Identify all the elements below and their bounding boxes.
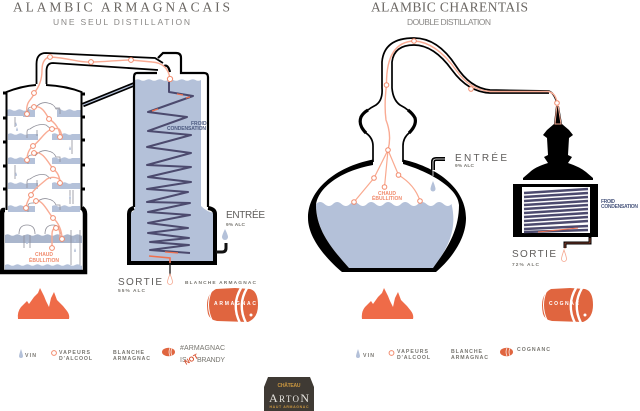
legend: blanche armagnac: BLANCHE — [451, 349, 483, 355]
label: entree left: ENTRÉE — [226, 208, 265, 221]
label: froid condensation: CONDENSATION — [167, 126, 206, 132]
label: froid condensation — [167, 121, 207, 132]
legend: blanche armagnac: BLANCHE — [113, 350, 145, 356]
neck and swan pipe outer — [360, 38, 557, 162]
label: froid right: FROID — [601, 199, 615, 205]
hashtag armagnac is not brandy: BRANDY — [197, 357, 225, 364]
legend: blanche armagnac: ARMAGNAC — [113, 356, 150, 362]
label: entree right — [455, 151, 507, 169]
legend: barrel — [162, 348, 175, 356]
legend: wine: VIN — [363, 353, 374, 359]
label: froid condensation: FROID — [191, 121, 207, 127]
condenser outline lower — [129, 208, 215, 263]
logo: chateau arton: CHÂTEAU — [278, 382, 301, 389]
orange condensation traces — [152, 94, 190, 253]
legend: cognac: COGNANC — [517, 347, 550, 353]
condenser outline upper — [134, 53, 208, 207]
dripping wine drops — [15, 122, 76, 252]
legend: barrel — [500, 348, 513, 356]
label: sortie right: SORTIE — [512, 249, 556, 260]
legend: wine: VIN — [25, 353, 36, 359]
connecting pipe — [83, 84, 135, 105]
hashtag armagnac is not brandy: #ARMAGNAC — [180, 345, 225, 352]
logo: chateau arton: ARTON — [269, 391, 309, 405]
legend: blanche armagnac — [113, 350, 150, 362]
label: chaud ebullition left: CHAUD — [35, 252, 53, 258]
logo: chateau arton: HAUT ARMAGNAC — [270, 405, 309, 409]
icon: barrel armagnac — [207, 288, 258, 323]
label: blanche armagnac: BLANCHE ARMAGNAC — [185, 280, 257, 286]
icon: flame left — [18, 288, 69, 319]
label: chaud ebullition left — [29, 252, 59, 264]
subtitle: une seul distillation: UNE SEUL DISTILLATION — [53, 17, 190, 27]
legend: wine — [19, 349, 36, 359]
logo: chateau arton — [264, 377, 314, 411]
legend: blanche armagnac — [451, 349, 488, 361]
icon: barrel cognac: COGNAC — [549, 301, 579, 307]
pot body outline — [308, 160, 466, 272]
column top pipe — [36, 53, 163, 84]
legend: blanche armagnac: ARMAGNAC — [451, 355, 488, 361]
icon: barrel cognac — [542, 288, 593, 323]
column liquid trays — [5, 109, 82, 271]
bubble caps — [15, 103, 80, 265]
hashtag armagnac is not brandy — [180, 345, 225, 367]
pot liquid — [316, 202, 453, 268]
legend: vapeurs — [389, 349, 431, 361]
label: entree right: ENTRÉE — [455, 151, 507, 164]
condenser cap — [523, 106, 593, 180]
legend: wine — [356, 349, 374, 359]
outlet pipe — [169, 263, 171, 277]
cap vapour line — [555, 105, 561, 124]
label: chaud ebullition right: ÉBULLITION — [372, 194, 402, 202]
column walls — [2, 85, 85, 272]
label: chaud ebullition right — [372, 191, 402, 202]
coil stripes — [524, 189, 588, 232]
label: sortie right: 72% ALC — [512, 262, 540, 268]
subtitle: double distillation: DOUBLE DISTILLATION — [407, 17, 491, 27]
label: sortie left — [118, 277, 162, 294]
icon: wine drop left — [222, 229, 228, 240]
icon: barrel armagnac: ARMAGNAC — [214, 301, 256, 307]
label: chaud ebullition right: CHAUD — [378, 191, 396, 197]
legend: vapeurs — [52, 350, 93, 362]
charentais pot still — [308, 38, 559, 272]
label: entree left — [226, 208, 265, 228]
label: chaud ebullition left: ÉBULLITION — [29, 256, 59, 264]
bulge thickening — [360, 110, 415, 133]
legend: vapeurs: VAPEURS — [59, 350, 91, 356]
label: sortie left: SORTIE — [118, 277, 162, 288]
armagnac condenser — [129, 53, 226, 277]
label: entree right: 9% ALC — [455, 163, 475, 169]
legend right — [356, 347, 550, 361]
wine drop — [430, 181, 436, 192]
label: entree left: 9% ALC — [226, 222, 246, 228]
inlet pipe charentais — [433, 159, 445, 170]
outlet pipe — [565, 237, 590, 248]
vapour path armagnac — [24, 55, 173, 250]
vapour branches — [354, 150, 420, 202]
condenser liquid — [130, 79, 214, 262]
sortie drop right — [562, 250, 566, 262]
inlet pipe — [216, 243, 226, 252]
cooling coil — [147, 82, 193, 253]
icon: flame right — [362, 288, 413, 319]
vapour nodes — [352, 39, 559, 204]
label: sortie left: 55% ALC — [118, 288, 146, 294]
label: sortie right — [512, 249, 556, 268]
orange trace — [538, 228, 578, 232]
vapour line charentais — [385, 41, 559, 150]
legend: vapeurs: D'ALCOOL — [59, 356, 93, 362]
hashtag armagnac is not brandy: NOT — [184, 353, 200, 367]
hashtag armagnac is not brandy: IS — [180, 357, 187, 364]
armagnac column still — [2, 53, 163, 272]
label: froid right: CONDENSATION — [601, 204, 638, 210]
coil outlet — [149, 256, 170, 263]
legend: vapeurs: VAPEURS — [397, 349, 429, 355]
icon: sortie drop left — [168, 274, 172, 284]
neck and swan pipe inner — [392, 45, 549, 162]
legend left — [19, 345, 225, 367]
vapour nodes — [24, 55, 173, 250]
charentais condenser box — [513, 184, 598, 237]
legend: vapeurs: D'ALCOOL — [397, 355, 431, 361]
label: froid right — [601, 199, 638, 210]
